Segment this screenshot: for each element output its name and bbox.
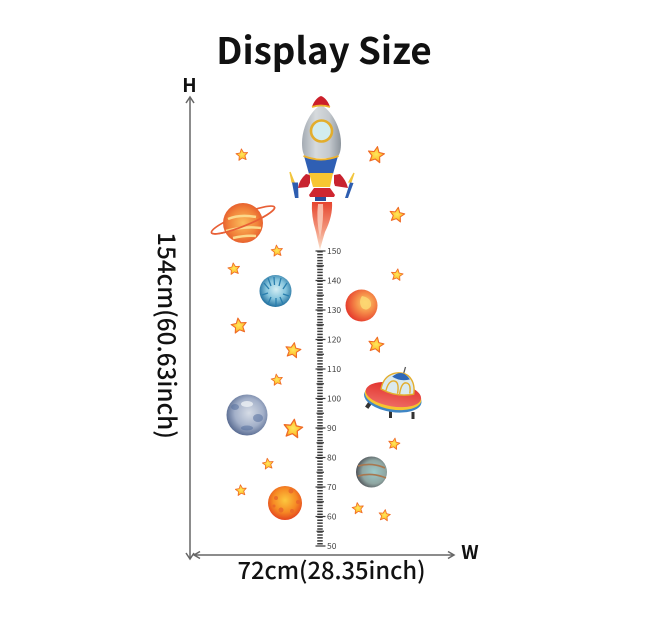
width dimension: 72cm(28.35inch) (237, 552, 426, 586)
rocket (290, 96, 354, 250)
right booster (334, 173, 354, 198)
height dimension: 154cm(60.63inch) (151, 232, 186, 439)
saucer (362, 381, 424, 416)
flame (312, 202, 332, 250)
height ruler: 60 (327, 510, 337, 522)
height ruler: 110 (327, 363, 341, 375)
height ruler: 120 (327, 334, 341, 346)
height ruler: 140 (327, 274, 341, 286)
height ruler: 100 (327, 392, 341, 404)
red skirt (309, 188, 335, 197)
height ruler: 150 (327, 245, 341, 257)
ufo (362, 367, 426, 419)
height ruler: 70 (327, 481, 337, 493)
planet: orange cratered (268, 486, 302, 520)
planet: red (346, 290, 378, 322)
height arrow (186, 97, 194, 559)
antenna (404, 367, 406, 374)
nose cone (312, 96, 330, 107)
yellow collar (309, 173, 333, 187)
stars (227, 145, 406, 521)
window (311, 120, 332, 142)
height ruler: 50 (327, 540, 337, 552)
height ruler: 130 (327, 304, 341, 316)
planet: teal-grey (356, 456, 387, 488)
height ruler: 90 (327, 422, 337, 434)
title: Display Size (216, 21, 432, 75)
ufo legs (365, 402, 414, 419)
planet: blue (260, 275, 292, 307)
planet: ringed orange (209, 202, 277, 243)
rocket body (302, 105, 341, 158)
left booster (290, 172, 310, 198)
height ruler (316, 245, 341, 552)
nozzle (315, 197, 326, 201)
height ruler: 80 (327, 452, 337, 464)
planet: grey-blue (226, 394, 268, 436)
blue band (304, 156, 338, 174)
label: W: W (461, 538, 479, 565)
label: H: H (182, 71, 197, 98)
width arrow (194, 552, 454, 558)
dome (381, 370, 417, 397)
